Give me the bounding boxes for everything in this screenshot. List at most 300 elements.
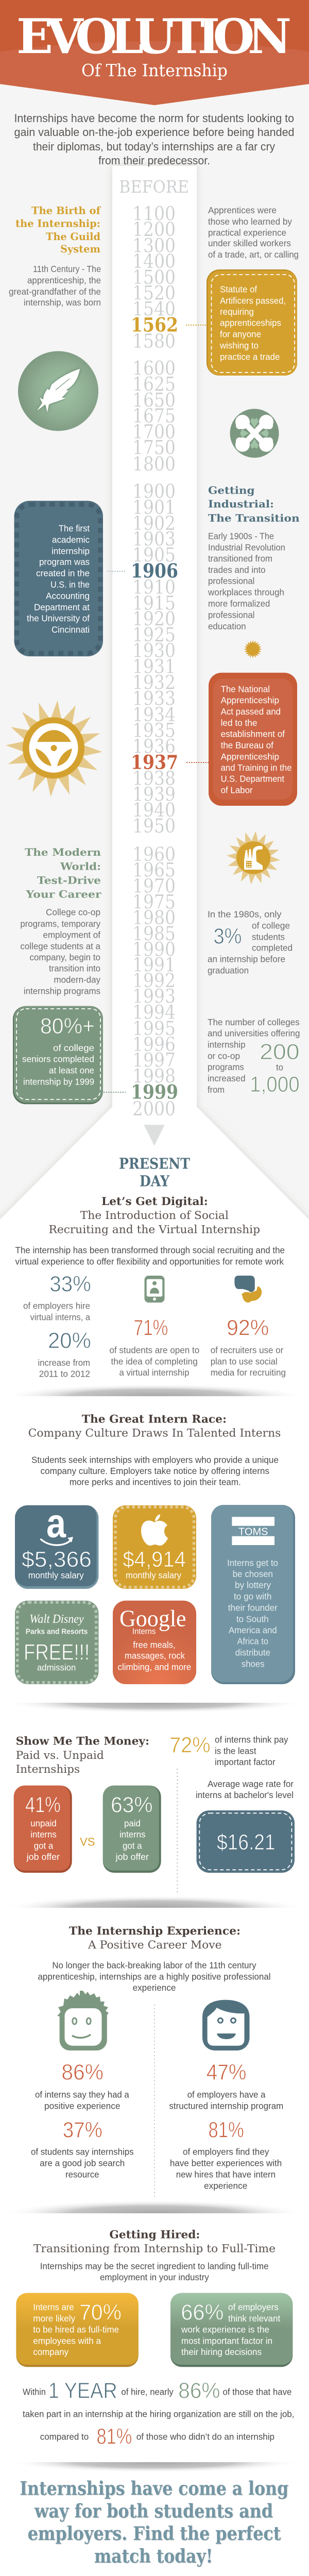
callout: statute of artificers: Statute of [220, 284, 257, 294]
text: 3 percent in the 1980s: graduation [208, 965, 249, 975]
timeline years: 1965 [132, 859, 176, 882]
timeline years: 1650 [132, 389, 176, 411]
timeline years [119, 177, 189, 1120]
text: 11th century [9, 264, 101, 308]
card: apple: monthly salary [126, 1570, 181, 1580]
text: 3 percent in the 1980s: an internship before [208, 954, 285, 964]
label: versus: VS [80, 1835, 95, 1848]
callout: first academic program [14, 501, 103, 656]
text: apprentices: those who learned by [208, 216, 292, 227]
icon: steering wheel sun [3, 697, 106, 800]
timeline years: 1915 [132, 592, 176, 614]
stat: 33 percent and 20 percent: increase from [38, 1358, 90, 1368]
timeline years: 1906 [131, 560, 178, 582]
card: 70 percent: more likely [33, 2313, 75, 2324]
text: hired intro: Internships may be the secret ingredient to landing full-time [40, 2261, 269, 2271]
callout: 80 percent of college seniors: at least one [49, 1065, 94, 1075]
card: 70 percent: company [33, 2347, 68, 2357]
stat: 86 percent [35, 2060, 129, 2111]
timeline years: 1910 [132, 576, 176, 598]
text: within one year: of hire, nearly [121, 2386, 174, 2397]
heading: getting hired: Getting Hired: [109, 2228, 200, 2241]
timeline years: 1993 [132, 986, 176, 1008]
text: within one year: 81% [97, 2424, 132, 2449]
timeline years: 1800 [132, 453, 176, 475]
text: early 1900s: Early 1900s - The [208, 531, 274, 541]
text: within one year [23, 2378, 294, 2449]
text: early 1900s: trades and into [208, 565, 266, 575]
timeline years: 1937 [131, 751, 178, 774]
stat: 71 percent: the idea of completing [111, 1356, 198, 1366]
icon: factory sun [225, 829, 282, 887]
intro text [14, 112, 295, 167]
text: college co-op programs: college students at a [20, 941, 100, 952]
icon: apple logo [141, 1514, 168, 1546]
timeline years: 1905 [132, 544, 176, 566]
timeline years: 1750 [132, 437, 176, 459]
stat: 71 percent: a virtual internship [119, 1367, 189, 1378]
card: 66 percent [170, 2293, 293, 2367]
card: amazon: monthly salary [28, 1570, 84, 1580]
timeline years: 1938 [132, 767, 176, 789]
timeline years: 1300 [132, 234, 176, 257]
text: colleges offering programs: increased [208, 1073, 245, 1083]
heading: birth of the internship: The Guild [46, 230, 100, 243]
text: 11th century: apprenticeship, the [27, 275, 101, 285]
text: college co-op programs: modern-day [54, 975, 100, 985]
text: early 1900s: transitioned from [208, 553, 272, 564]
card: toms: distribute [235, 1647, 270, 1657]
timeline years: 1936 [132, 736, 176, 758]
card: 70 percent: to be hired as full-time [33, 2324, 119, 2334]
callout: statute of artificers: practice a trade [220, 351, 280, 362]
text: within one year: taken part in an internship at the hiring organization are still on the job, [23, 2409, 294, 2419]
timeline years: 1520 [132, 282, 176, 304]
timeline years: 1675 [132, 405, 176, 427]
text: colleges offering programs: or co-op [208, 1050, 240, 1061]
heading: the modern world: World: [60, 860, 101, 872]
section: let's get digital [15, 1195, 286, 1379]
text: 3 percent in the 1980s [208, 909, 293, 975]
stat: 81 percent: have better experiences with [170, 2158, 282, 2168]
stat: 86 percent: 86% [61, 2060, 104, 2085]
text: culture intro: Students seek internships with employers who provide a unique [31, 1454, 279, 1465]
card: unpaid interns [14, 1786, 72, 1873]
card: amazon: $5,366 [22, 1547, 92, 1572]
callout: statute of artificers: for anyone [220, 329, 261, 339]
stat: 47 percent: of employers have a [187, 2090, 266, 2100]
text: 3 percent in the 1980s: 3% [213, 924, 242, 949]
heading: great intern race [28, 1413, 281, 1439]
card: amazon [15, 1500, 98, 1589]
stat: 37 percent [31, 2117, 134, 2179]
callout: national apprenticeship act: Apprenticeship [221, 695, 279, 705]
text: college co-op programs: programs, temporary [20, 919, 100, 929]
text: 3 percent in the 1980s: completed [252, 943, 293, 953]
arrow: to present day [144, 1125, 165, 1146]
text: average wage [196, 1778, 294, 1800]
heading: show me the money [16, 1735, 149, 1775]
stat: 81 percent [170, 2117, 282, 2191]
callout: first academic program: program was [39, 557, 90, 567]
callout: first academic program: Department at [34, 602, 90, 612]
callout: 80 percent of college seniors: seniors completed [22, 1054, 94, 1064]
stat: 71 percent [109, 1316, 199, 1378]
stat: 72 percent: 72% [169, 1733, 211, 1758]
heading: getting hired: Transitioning from Internship to Full-Time [33, 2243, 276, 2255]
text: experience intro: experience [133, 1982, 176, 1993]
text: colleges offering programs: from [208, 1084, 225, 1095]
card: 66 percent: of employers [228, 2302, 279, 2312]
text: colleges offering programs: 200 [260, 1040, 300, 1064]
stat: 72 percent: is the least [215, 1745, 256, 1756]
heading: the modern world: Your Career [25, 888, 101, 901]
callout: national apprenticeship act: U.S. Department [221, 774, 284, 784]
stat: 33 percent and 20 percent: virtual interns, a [30, 1312, 90, 1323]
icon: toms logo: TOMS [238, 1526, 268, 1537]
timeline years: 1992 [132, 970, 176, 992]
text: digital intro: virtual experience to offer flexibility and opportunities for remote work [15, 1256, 284, 1266]
timeline years: 1990 [132, 939, 176, 960]
timeline years: 1998 [132, 1065, 176, 1088]
stat: 72 percent: of interns think pay [215, 1735, 288, 1745]
stat: 47 percent: 47% [207, 2060, 246, 2085]
card: unpaid interns: interns [30, 1829, 57, 1840]
stat: 37 percent: of students say internships [31, 2147, 134, 2157]
callout: national apprenticeship act: The National [221, 684, 270, 694]
heading: internship experience: The Internship Experience: [69, 1924, 241, 1937]
icon: small burst [244, 640, 262, 658]
heading: present day: PRESENT [119, 1155, 190, 1172]
icon: toms logo [232, 1517, 274, 1545]
text: early 1900s: workplaces through [208, 587, 284, 598]
heading: great intern race: Company Culture Draws In Talented Interns [28, 1427, 281, 1439]
heading: birth of the internship: The Birth of [31, 205, 101, 217]
text: experience intro [38, 1960, 271, 1993]
timeline years: 1933 [132, 687, 176, 709]
card: google [113, 1601, 196, 1684]
closing statement: match today! [94, 2546, 213, 2567]
callout: first academic program: Cincinnati [52, 624, 90, 635]
heading: internship experience: A Positive Career Move [88, 1939, 221, 1951]
callout: 80 percent of college seniors: internship by 1999 [23, 1076, 94, 1087]
text: college co-op programs: employment of [43, 930, 100, 940]
section: the internship experience [31, 1924, 283, 2198]
timeline years: 1580 [132, 330, 176, 352]
card: unpaid interns: unpaid [30, 1818, 57, 1828]
heading: show me the money: Show Me The Money: [16, 1735, 149, 1748]
stat: 71 percent: 71% [134, 1316, 168, 1341]
timeline years: 1999 [131, 1081, 178, 1104]
card: toms: to go with [234, 1591, 271, 1601]
heading: let's get digital [48, 1195, 260, 1235]
timeline years: 1901 [132, 496, 176, 518]
text: colleges offering programs: programs [208, 1062, 244, 1072]
card: unpaid interns: 41% [25, 1792, 61, 1817]
stat: 47 percent: structured internship program [169, 2100, 283, 2111]
card: wage [197, 1810, 295, 1873]
heading: birth of the internship: System [60, 243, 100, 255]
text: hired intro: employment in your industry [100, 2272, 209, 2282]
text: within one year: Within [23, 2386, 46, 2397]
text: hired intro [40, 2261, 269, 2282]
closing statement: way for both students and [34, 2501, 273, 2522]
section: show me the money [14, 1733, 295, 1894]
card: unpaid interns: got a [34, 1840, 54, 1851]
timeline years: 1991 [132, 954, 176, 976]
card: disney: FREE!!! [24, 1640, 90, 1665]
text: apprentices [208, 205, 299, 260]
card: paid interns: got a [123, 1840, 142, 1851]
callout: first academic program: the University of [27, 613, 90, 623]
stat: 92 percent: of recruiters use or [211, 1345, 283, 1355]
subtitle: Of The Internship [81, 60, 228, 80]
closing statement: employers. Find the perfect [28, 2523, 281, 2545]
callout: first academic program: internship [52, 546, 90, 556]
callout: national apprenticeship act: and Training in the [221, 762, 291, 773]
text: college co-op programs: College co-op [46, 907, 100, 918]
callout: first academic program: created in the [36, 568, 90, 579]
stat: 47 percent [169, 2060, 283, 2111]
heading: the modern world [25, 846, 101, 901]
callout: 80 percent of college seniors: of college [53, 1043, 94, 1053]
text: colleges offering programs: internship [208, 1039, 245, 1049]
heading: let's get digital: Recruiting and the Virtual Internship [48, 1223, 260, 1235]
timeline years: 1700 [132, 421, 176, 443]
closing statement [20, 2478, 288, 2567]
intro text: gain valuable on-the-job experience before being handed [14, 126, 295, 139]
text: colleges offering programs: The number of colleges [208, 1017, 300, 1027]
card: paid interns: paid [124, 1818, 141, 1828]
timeline years: 1562 [131, 313, 178, 336]
timeline years: 1200 [132, 218, 176, 241]
card: google: Interns [132, 1628, 156, 1636]
card: paid interns: 63% [111, 1792, 153, 1817]
timeline years: 1625 [132, 373, 176, 395]
stat: 92 percent: plan to use social [211, 1356, 278, 1366]
heading: show me the money: Paid vs. Unpaid [16, 1749, 104, 1761]
timeline years: 1939 [132, 783, 176, 805]
text: 3 percent in the 1980s: students [252, 931, 285, 942]
icon: amazon logo: a [46, 1500, 66, 1546]
callout: statute of artificers: Artificers passed, [220, 295, 286, 306]
timeline years: 1925 [132, 624, 176, 646]
card: apple: $4,914 [123, 1547, 186, 1572]
callout: national apprenticeship act: establishment of [221, 729, 285, 739]
card: paid interns: interns [119, 1829, 146, 1840]
heading: let's get digital: Let’s Get Digital: [101, 1195, 208, 1208]
timeline years: 1970 [132, 875, 176, 897]
card: 66 percent: work experience is the [181, 2324, 269, 2334]
text: early 1900s: professional [208, 609, 254, 620]
card: apple [113, 1505, 196, 1589]
timeline years: 2000 [132, 1098, 176, 1120]
stat: 81 percent: experience [204, 2180, 247, 2191]
heading: birth of the internship [15, 205, 101, 255]
heading: the modern world: Test-Drive [37, 874, 101, 886]
card: 70 percent: Interns are [33, 2302, 74, 2312]
text: digital intro: The internship has been transformed through social recruiting and the [15, 1245, 285, 1256]
text: 11th century: 11th Century - The [33, 264, 101, 274]
callout: national apprenticeship act [209, 673, 297, 806]
text: within one year: of those who didn’t do an internship [136, 2432, 274, 2442]
timeline years: 1400 [132, 250, 176, 273]
text: culture intro: more perks and incentives to join their team. [70, 1477, 241, 1487]
text: college co-op programs: company, begin to [29, 952, 100, 962]
timeline years: 1935 [132, 720, 176, 742]
connector: 1999 [104, 1092, 126, 1093]
connector: 1562 [186, 325, 207, 326]
card: 70 percent: 70% [79, 2300, 122, 2325]
stat: 86 percent: positive experience [44, 2100, 120, 2111]
stat: 81 percent: 81% [208, 2117, 244, 2142]
callout: first academic program: academic [52, 534, 90, 545]
stat: 86 percent: of interns say they had a [35, 2090, 129, 2100]
text: colleges offering programs: 1,000 [250, 1072, 300, 1097]
heading: getting industrial: Getting [208, 484, 255, 496]
text: early 1900s: Industrial Revolution [208, 542, 285, 552]
callout: statute of artificers: apprenticeships [220, 318, 281, 328]
timeline years: 1900 [132, 481, 176, 503]
timeline years: 1975 [132, 891, 176, 913]
heading: getting industrial [208, 484, 300, 524]
text: 11th century: internship, was born [24, 297, 101, 308]
intro text: Internships have become the norm for students looking to [14, 112, 294, 125]
callout: national apprenticeship act: led to the [221, 718, 257, 728]
timeline years: 1931 [132, 656, 176, 678]
timeline years: 1932 [132, 671, 176, 693]
timeline years: 1997 [132, 1049, 176, 1072]
card: google: Google [119, 1605, 186, 1632]
heading: let's get digital: The Introduction of Social [80, 1209, 229, 1222]
card: 66 percent: most important factor in [181, 2335, 272, 2346]
section: the great intern race [15, 1413, 295, 1684]
card: wage: $16.21 [217, 1830, 276, 1855]
heading: getting hired [33, 2228, 276, 2255]
text: average wage: Average wage rate for [208, 1778, 294, 1789]
text: college co-op programs [20, 907, 100, 996]
card: google: climbing, and more [117, 1662, 191, 1672]
timeline years: 1920 [132, 608, 176, 630]
text: early 1900s: professional [208, 576, 254, 586]
stat: 37 percent: resource [65, 2169, 99, 2179]
stat: 33 percent and 20 percent: of employers hire [23, 1301, 90, 1311]
text: culture intro: company culture. Employers take notice by offering interns [40, 1466, 269, 1476]
card: google: massages, rock [125, 1650, 185, 1660]
card: 66 percent: think relevant [228, 2313, 280, 2324]
callout: statute of artificers [207, 269, 297, 376]
text: colleges offering programs: to [276, 1062, 283, 1072]
stat: 81 percent: new hires that have intern [176, 2169, 276, 2179]
text: 3 percent in the 1980s: of college [252, 921, 290, 931]
timeline years: 1940 [132, 799, 176, 821]
card: 70 percent: employees with a [33, 2335, 101, 2346]
timeline years: 1934 [132, 704, 176, 726]
callout: 80 percent of college seniors: 80%+ [40, 1014, 95, 1039]
intro text: from their predecessor. [98, 154, 210, 167]
text: college co-op programs: transition into [49, 963, 100, 974]
text: early 1900s: education [208, 621, 246, 631]
card: toms: be chosen [233, 1569, 273, 1579]
stat: 71 percent: of students are open to [109, 1345, 199, 1355]
icon: smiling face [202, 2000, 249, 2050]
callout: national apprenticeship act: of Labor [221, 785, 253, 795]
heading: show me the money: Internships [16, 1763, 80, 1775]
heading: present day [119, 1155, 190, 1190]
card: toms: by lottery [235, 1580, 271, 1590]
stat: 33 percent and 20 percent [23, 1272, 91, 1379]
timeline years: 1600 [132, 358, 176, 380]
icon: guild emblem [230, 409, 279, 457]
stat: 92 percent [211, 1316, 286, 1378]
card: toms: America and [229, 1625, 277, 1635]
card: disney: Parks and Resorts [26, 1628, 88, 1636]
text: average wage: interns at bachelor's level [196, 1790, 294, 1800]
heading: getting industrial: Industrial: [208, 498, 274, 510]
icon: feather [18, 351, 98, 431]
card: google: free meals, [133, 1639, 176, 1650]
timeline years: BEFORE [119, 177, 189, 197]
stat: 33 percent and 20 percent: 33% [49, 1272, 91, 1297]
timeline years: 1930 [132, 640, 176, 662]
timeline years: 1100 [132, 203, 176, 225]
text: early 1900s [208, 531, 285, 631]
stat: 33 percent and 20 percent: 2011 to 2012 [39, 1369, 90, 1379]
card: 66 percent: 66% [181, 2300, 224, 2325]
card: disney: admission [37, 1663, 76, 1673]
callout: national apprenticeship act: Apprenticeship [221, 751, 279, 761]
card: disney [15, 1601, 98, 1684]
heading: the modern world: The Modern [25, 846, 101, 858]
text: within one year: of those that have [222, 2386, 291, 2397]
text: apprentices: Apprentices were [208, 205, 277, 215]
text: within one year: compared to [40, 2432, 89, 2442]
icon: chat bubbles [234, 1276, 262, 1302]
callout: statute of artificers: wishing to [219, 341, 259, 351]
section: getting hired [16, 2228, 294, 2449]
card: paid interns: job offer [115, 1852, 149, 1862]
timeline years: 1500 [132, 266, 176, 289]
header banner [0, 0, 309, 105]
timeline years: 1994 [132, 1002, 176, 1024]
timeline years: 1996 [132, 1033, 176, 1056]
timeline years: 1980 [132, 907, 176, 929]
text: within one year: 86% [178, 2378, 220, 2403]
text: apprentices: practical experience [208, 227, 286, 238]
stat: 72 percent [169, 1733, 288, 1767]
card: toms: Interns get to [227, 1557, 278, 1568]
timeline years: 1985 [132, 923, 176, 945]
timeline years: 1960 [132, 843, 176, 866]
card: paid interns [103, 1786, 161, 1873]
stat: 33 percent and 20 percent: 20% [48, 1329, 91, 1353]
card: toms [211, 1505, 295, 1684]
callout: first academic program: Accounting [46, 590, 90, 601]
timeline years: 1995 [132, 1018, 176, 1040]
text: digital intro [15, 1245, 285, 1266]
stat: 37 percent: 37% [63, 2117, 102, 2142]
icon: spiky hair face [57, 1991, 109, 2050]
text: 11th century: great-grandfather of the [9, 286, 101, 297]
heading: getting industrial: The Transition [208, 512, 300, 524]
callout: first academic program: U.S. in the [50, 580, 90, 590]
stat: 92 percent: media for recruiting [211, 1367, 286, 1378]
text: colleges offering programs: and universities offering [208, 1028, 300, 1039]
connector: 1937 [186, 762, 209, 763]
text: within one year: 1 YEAR [48, 2378, 117, 2403]
timeline years: 1540 [132, 298, 176, 320]
heading: birth of the internship: the Internship: [15, 217, 100, 230]
